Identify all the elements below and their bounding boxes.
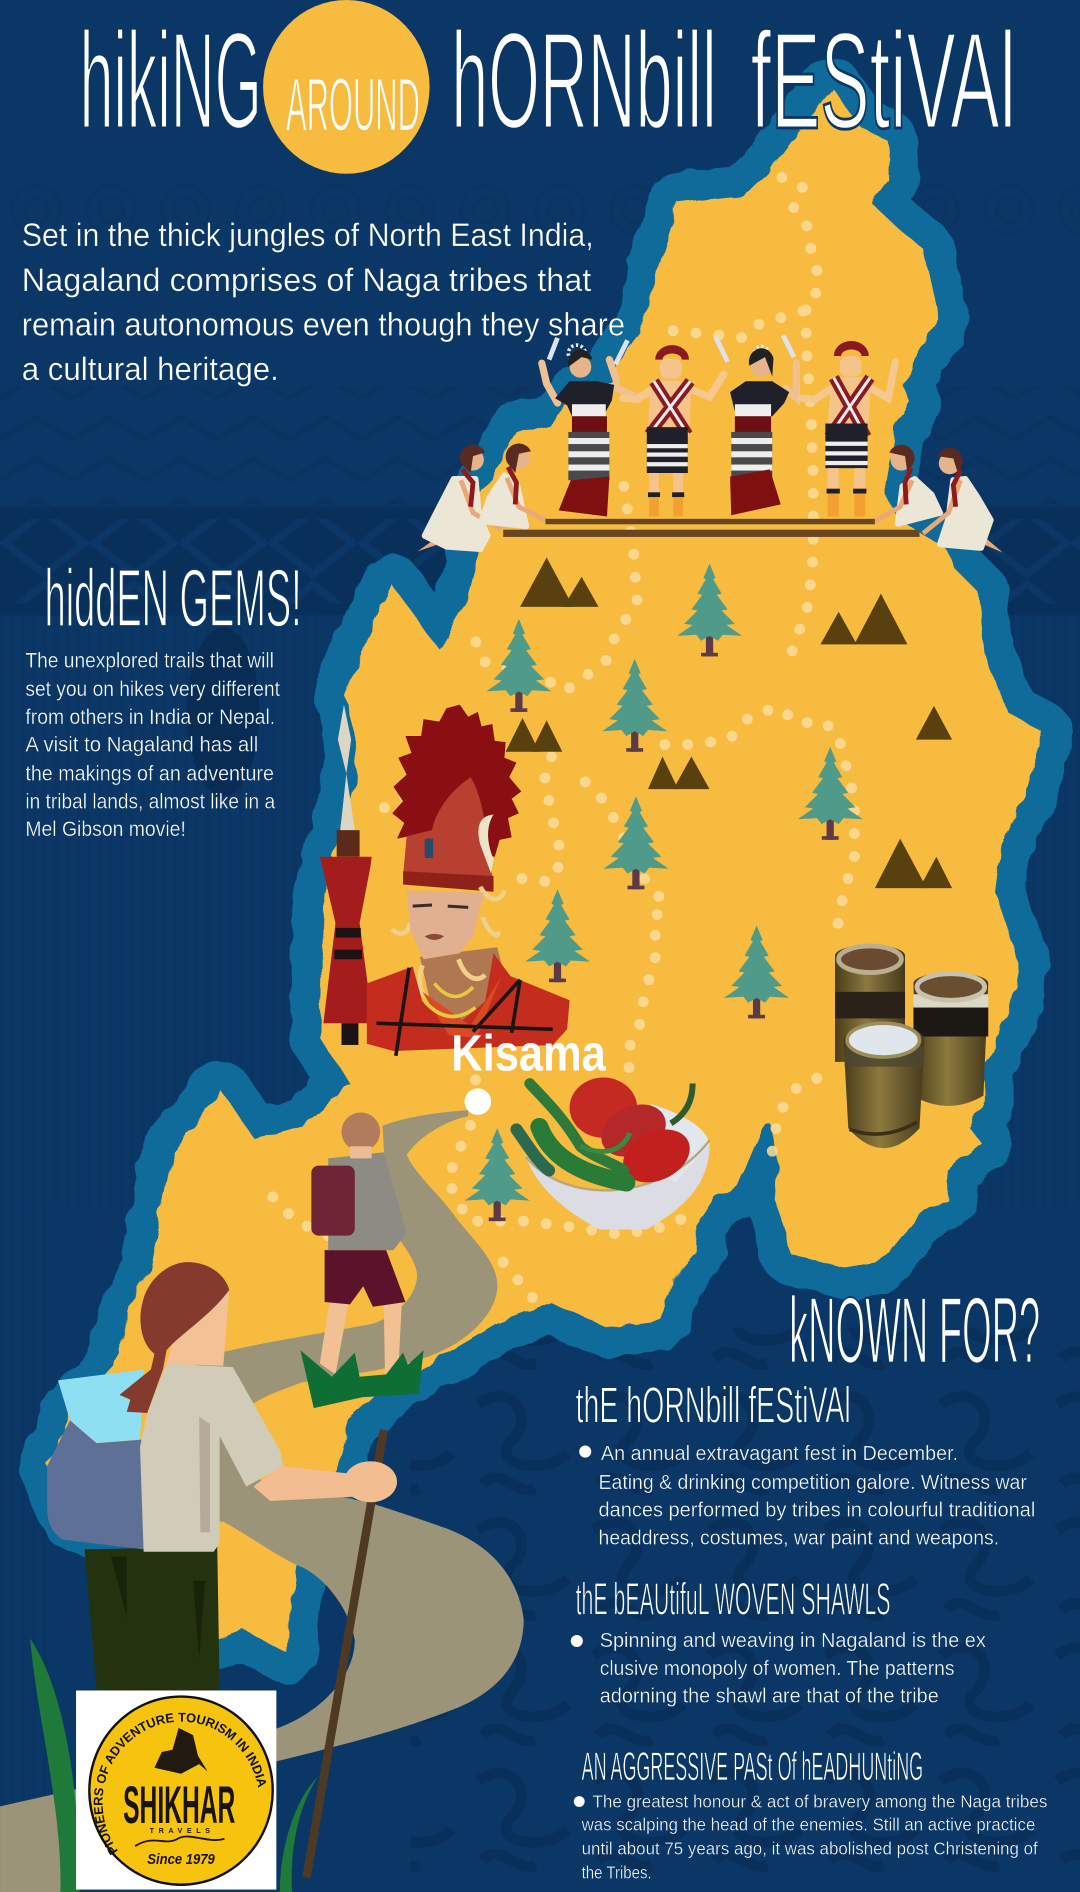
spear blade: [338, 705, 355, 830]
heading: hidden gems: hiddEN GEMS!: [45, 553, 302, 644]
bowl: [526, 1140, 710, 1230]
illustration: chilli bowl: [516, 1078, 710, 1230]
hair curls: [392, 887, 504, 995]
title: fEStiVAl: [751, 4, 1016, 158]
text: headhunting bullet: was scalping the head of the enemies. Still an active practice: [581, 1814, 1035, 1834]
title badge circle: [263, 0, 430, 174]
text: hidden gems: A visit to Nagaland has all: [25, 734, 258, 757]
hair and ponytail: [119, 1262, 229, 1413]
mountains: [506, 557, 952, 888]
dotted hiking trails: [273, 177, 854, 1303]
illustration: rice beer mugs: [835, 945, 988, 1148]
tunic: [367, 953, 570, 1051]
text: woven shawls bullet: Spinning and weaving in Nagaland is the ex: [600, 1630, 986, 1652]
illustration: small hiker: [311, 1113, 407, 1374]
green chillies: [516, 1129, 549, 1170]
text: woven shawls bullet: [571, 1630, 986, 1708]
logo: Shikhar: Since 1979: [147, 1852, 215, 1868]
text: hidden gems: from others in India or Nepal.: [25, 706, 275, 729]
text: hidden gems: Mel Gibson movie!: [25, 818, 186, 841]
red chillies: [570, 1078, 637, 1138]
text: headhunting bullet: [574, 1792, 1048, 1883]
map of Nagaland: outline band: [48, 88, 1043, 1653]
text: woven shawls bullet: clusive monopoly of women. The patterns: [600, 1658, 955, 1680]
text: hornbill festival bullet: [579, 1443, 1035, 1549]
intro paragraph: Set in the thick jungles of North East India,: [22, 217, 594, 253]
illustration: grass under hiker: [300, 1350, 424, 1408]
text: headhunting bullet: until about 75 years ago, it was abolished post Christening of: [582, 1839, 1038, 1859]
logo: Shikhar: TRAVELS: [150, 1826, 210, 1835]
trousers: [84, 1547, 220, 1690]
title: hORNbill: [451, 4, 717, 158]
illustration: walking staff: [307, 1430, 384, 1878]
illustration: Naga warrior: [320, 705, 570, 1056]
text: hornbill festival bullet: headdress, costumes, war paint and weapons.: [599, 1527, 999, 1549]
Kisama location label: [451, 1024, 606, 1115]
text: hidden gems: the makings of an adventure: [25, 763, 274, 786]
text: woven shawls bullet: adorning the shawl are that of the tribe: [600, 1686, 939, 1708]
title: hikiNG: [80, 4, 262, 158]
text: hidden gems: The unexplored trails that will: [25, 649, 274, 672]
map of Nagaland: land: [48, 88, 1043, 1653]
text: hidden gems: in tribal lands, almost like in a: [25, 790, 275, 813]
man dancer 1: [623, 345, 724, 516]
logo: Shikhar: PIONEERS OF ADVENTURE TOURISM IN INDIA: [94, 1712, 266, 1856]
backpack: [47, 1420, 144, 1549]
illustration: large hiker with backpack: [47, 1262, 284, 1690]
logo: Shikhar: SHIKHAR: [123, 1776, 235, 1835]
intro paragraph: [22, 217, 625, 387]
woman dancer 1: [542, 338, 652, 516]
spear shaft: [320, 857, 373, 1023]
heading: an aggressive past of headhunting: AN AGGRESSIVE PASt Of hEADHUNtiNG: [582, 1745, 923, 1789]
text: hidden gems: [25, 649, 280, 841]
man dancer 2: [801, 341, 895, 516]
intro paragraph: remain autonomous even though they share: [22, 306, 625, 342]
neck: [167, 1291, 229, 1366]
face: [407, 890, 484, 959]
logo: Shikhar: [76, 1690, 276, 1890]
hat: [403, 777, 494, 887]
neck and scarf base: [420, 947, 507, 1020]
text: hornbill festival bullet: Eating & drinking competition galore. Witness war: [599, 1472, 1027, 1494]
title: [80, 0, 1016, 174]
bamboo poles: [503, 519, 919, 537]
text: headhunting bullet: The greatest honour & act of bravery among the Naga tribes: [592, 1792, 1048, 1812]
illustration: dancers and bamboo poles: [418, 335, 1003, 553]
intro paragraph: a cultural heritage.: [22, 351, 279, 387]
illustration: hiker arm and hand: [253, 1461, 397, 1502]
Kisama location label: Kisama: [451, 1024, 606, 1081]
woman dancer 2: [716, 335, 796, 515]
heading: the hornbill festival: thE hORNbill fEStiVAl: [576, 1377, 851, 1434]
title: AROUND: [286, 62, 420, 146]
text: hornbill festival bullet: dances performed by tribes in colourful traditional: [599, 1500, 1035, 1522]
text: hornbill festival bullet: An annual extravagant fest in December.: [601, 1443, 958, 1465]
feather crest: [392, 705, 521, 857]
text: hidden gems: set you on hikes very different: [25, 678, 280, 701]
shirt: [140, 1363, 284, 1552]
seated women: [418, 443, 1003, 553]
trees: [465, 563, 863, 1221]
road: [0, 1110, 524, 1892]
intro paragraph: Nagaland comprises of Naga tribes that: [22, 262, 591, 298]
illustration: foreground grass: [30, 1639, 319, 1892]
text: headhunting bullet: the Tribes.: [582, 1863, 652, 1883]
